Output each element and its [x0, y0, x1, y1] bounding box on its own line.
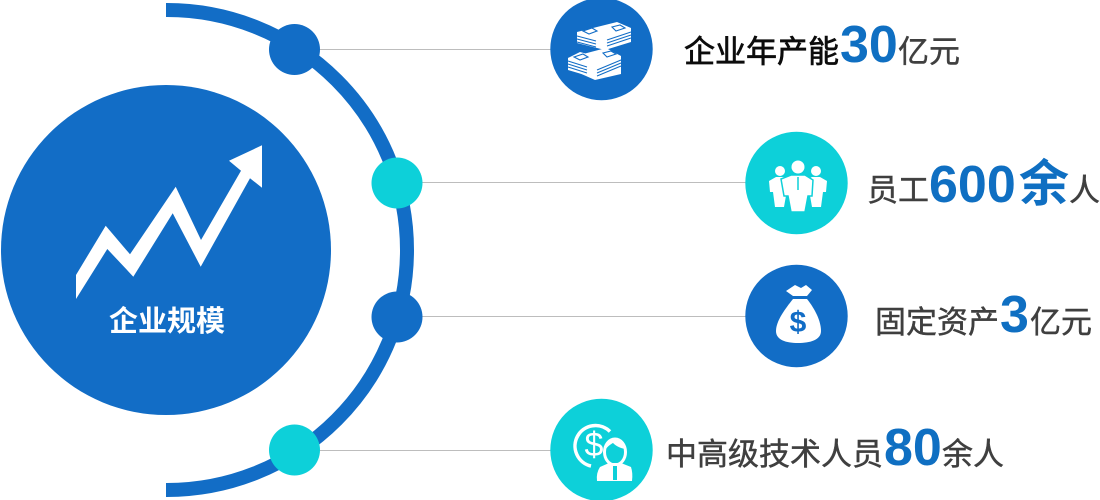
icon: money bag: $	[790, 306, 807, 339]
panel: main circle	[1, 85, 331, 415]
text: employees: 余	[1019, 156, 1069, 212]
text: capacity: 企业年产能	[684, 34, 839, 70]
large arc	[166, 10, 407, 490]
text: senior technicians: 余人	[942, 437, 1004, 472]
text: employees: 600	[929, 156, 1016, 214]
text: senior technicians: 80	[884, 419, 942, 477]
text: senior technicians: 中高级技术人员	[666, 437, 883, 472]
icon: three people	[769, 160, 827, 212]
node: upper middle	[372, 158, 422, 208]
icon: person with dollar	[575, 426, 632, 481]
text: capacity: 亿元	[898, 34, 960, 70]
text: fixed assets: 亿元	[1030, 305, 1092, 340]
item: employees	[745, 132, 1100, 234]
node: lower middle	[372, 292, 422, 342]
connector lines	[295, 50, 746, 450]
icon: money stacks	[568, 22, 631, 80]
icon: rising arrow	[76, 145, 262, 299]
text: fixed assets: 固定资产	[875, 305, 999, 340]
text: fixed assets: 3	[1000, 286, 1029, 344]
node: bottom	[269, 424, 320, 476]
icon: person with dollar: $	[585, 426, 604, 464]
main circle label: 企业规模	[109, 305, 225, 338]
text: employees: 员工	[867, 173, 929, 208]
item: senior technicians	[550, 399, 1004, 500]
node: top	[269, 24, 320, 75]
item: capacity	[550, 0, 960, 100]
text: capacity: 30	[840, 16, 898, 74]
icon: money bag	[776, 285, 821, 343]
item: fixed assets	[745, 265, 1092, 367]
text: employees: 人	[1069, 173, 1100, 208]
